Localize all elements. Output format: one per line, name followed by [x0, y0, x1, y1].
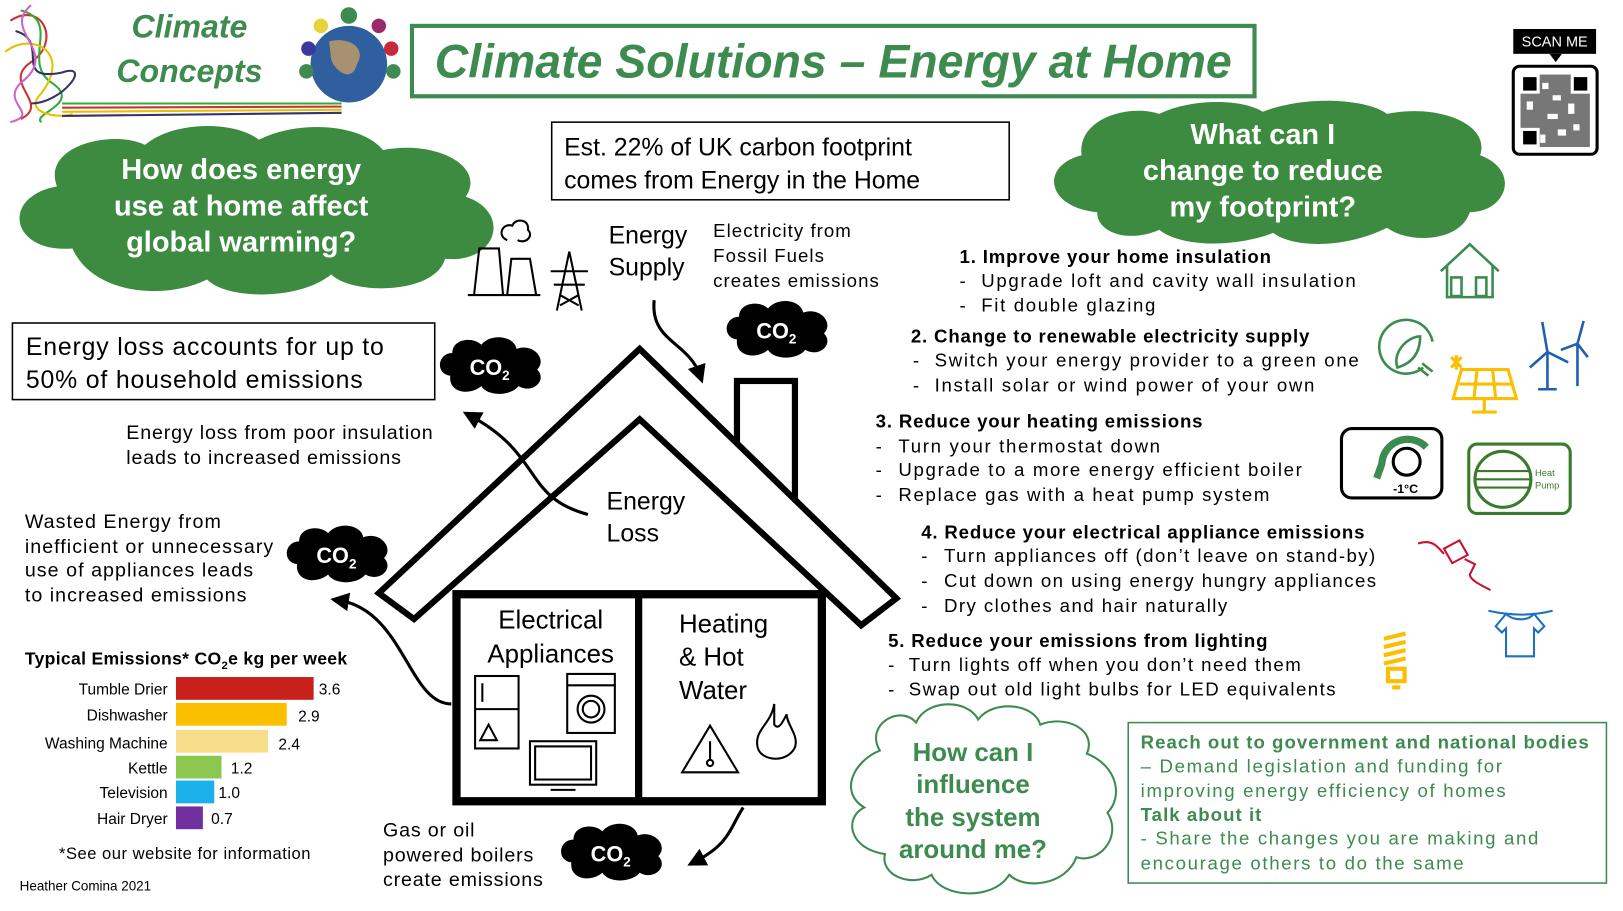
icon: heat pump: Pump — [1535, 481, 1559, 491]
cloud: what can I change: my footprint? — [1169, 191, 1356, 223]
text: wasted energy: inefficient or unnecessary — [25, 536, 274, 558]
box: reach out — [1128, 723, 1606, 883]
item 5: 5. Reduce your emissions from lighting — [888, 630, 1268, 651]
bar chart: typical emissions: 3.6 — [319, 682, 340, 699]
item 4: Turn appliances off (don’t leave on stand-by) — [944, 545, 1377, 566]
co2 cloud 3: 2 — [349, 556, 356, 571]
box: reach out: - Share the changes you are making and — [1141, 828, 1540, 849]
text: wasted energy: use of appliances leads — [25, 560, 254, 582]
co2 cloud 2: 2 — [789, 332, 796, 347]
text: boilers — [383, 819, 544, 891]
item 1 — [960, 246, 1357, 316]
cloud: how can I influence: around me? — [899, 836, 1047, 864]
cloud: how does energy affect global warming: use at home affect — [114, 190, 369, 222]
bar chart: typical emissions: 1.2 — [231, 760, 252, 777]
CO2 clouds — [440, 337, 541, 394]
co2 cloud 2 — [727, 301, 827, 358]
bar chart: typical emissions: Hair Dryer — [97, 811, 168, 828]
item 3: - — [876, 459, 884, 480]
text: poor insulation: Energy loss from poor insulation — [126, 422, 434, 444]
item 5: - — [888, 679, 896, 700]
item 3 — [876, 411, 1303, 505]
cloud: how does energy affect global warming: global warming? — [126, 227, 356, 259]
cloud: how can I influence — [851, 704, 1116, 893]
icon: thermostat — [1341, 429, 1442, 498]
item 4: Cut down on using energy hungry appliances — [944, 570, 1378, 591]
icon: TV — [530, 741, 596, 790]
cloud: what can I change: What can I — [1190, 119, 1335, 151]
item 4 — [921, 521, 1378, 616]
label: heating & hot water — [679, 611, 768, 705]
item 3: - — [876, 484, 884, 505]
bar chart: typical emissions: Kettle — [128, 760, 168, 777]
item 1: Upgrade loft and cavity wall insulation — [981, 270, 1357, 291]
solutions list — [876, 246, 1378, 700]
house — [379, 349, 896, 801]
item 5: Turn lights off when you don’t need them — [909, 654, 1302, 675]
icon: house — [1441, 244, 1499, 297]
arrow: energy loss — [471, 416, 588, 515]
item 3: 3. Reduce your heating emissions — [876, 411, 1203, 432]
co2 cloud 4 — [561, 824, 662, 880]
arrow: boiler — [696, 807, 743, 861]
energy supply text: Fossil Fuels — [713, 245, 825, 266]
icon: power plant — [468, 221, 540, 295]
item 5: - — [888, 654, 896, 675]
logo text: Climate — [131, 8, 247, 44]
icon: unplugged — [1418, 540, 1491, 590]
CO2 clouds: 2 — [502, 368, 510, 383]
label: electrical appliances: Electrical — [498, 606, 603, 634]
item 5: Swap out old light bulbs for LED equivalents — [909, 679, 1337, 700]
text: wasted energy: Wasted Energy from — [25, 511, 222, 533]
co2 cloud 2: CO — [756, 319, 789, 344]
item 3: - — [876, 435, 884, 456]
item 2 — [911, 326, 1360, 395]
label: energy loss — [607, 488, 686, 547]
label: electrical appliances — [487, 606, 614, 669]
logo: climate concepts: Concepts — [116, 53, 262, 89]
box: reach out: improving energy efficiency of homes — [1141, 780, 1507, 801]
bar chart: typical emissions: Dishwasher — [87, 708, 168, 725]
cloud: how does energy affect global warming — [20, 126, 494, 294]
bar chart: typical emissions: Typical Emissions* CO — [25, 649, 222, 669]
footnote: *See our website for information — [59, 844, 311, 863]
item 2: Switch your energy provider to a green one — [935, 349, 1360, 370]
text: boilers: powered boilers — [383, 844, 534, 866]
item 1: - — [960, 270, 967, 291]
energy loss box: Energy loss accounts for up to — [26, 334, 385, 361]
energy supply text: Electricity from — [713, 220, 852, 241]
text: boilers: Gas or oil — [383, 819, 475, 841]
QR code: SCAN ME — [1522, 35, 1588, 51]
energy supply text: Supply — [609, 254, 685, 281]
bar chart: typical emissions: 0.7 — [211, 811, 233, 828]
bar chart: typical emissions: 2.4 — [278, 737, 300, 754]
arrow: energy supply — [654, 300, 700, 375]
item 4: 4. Reduce your electrical appliance emissions — [921, 521, 1365, 542]
text: wasted energy: to increased emissions — [25, 584, 248, 606]
text: poor insulation — [126, 422, 434, 469]
item 3: Replace gas with a heat pump system — [898, 484, 1271, 505]
globe — [311, 26, 387, 102]
box: reach out: Talk about it — [1141, 804, 1262, 825]
item 2: Install solar or wind power of your own — [935, 374, 1316, 395]
bar chart: typical emissions: 2 — [222, 660, 228, 672]
energy supply text: creates emissions — [713, 270, 880, 291]
bar chart: typical emissions — [25, 649, 347, 829]
item 4: Dry clothes and hair naturally — [944, 595, 1229, 616]
text: boilers: create emissions — [383, 869, 544, 891]
item 5 — [888, 630, 1337, 700]
text: poor insulation: leads to increased emissions — [126, 447, 402, 469]
stat box: 22% — [552, 122, 1009, 200]
cloud: what can I change: change to reduce — [1143, 155, 1383, 187]
item 4: - — [921, 545, 929, 566]
icon: flame — [757, 704, 796, 759]
energy supply text — [609, 220, 880, 291]
co2 cloud 4: CO — [591, 841, 623, 866]
bar chart: typical emissions: e kg per week — [228, 649, 347, 669]
label: energy loss: Loss — [607, 520, 659, 547]
QR code — [1513, 29, 1597, 154]
box: reach out: Reach out to government and national bodies — [1141, 731, 1590, 752]
icon: solar panel — [1451, 355, 1516, 412]
cloud: how can I influence: the system — [905, 804, 1041, 832]
bar chart: typical emissions: Television — [100, 785, 168, 802]
icon: pylon — [551, 252, 588, 311]
icon: leaf plug — [1379, 320, 1433, 376]
label: electrical appliances: Appliances — [487, 641, 614, 669]
arrow: appliances — [340, 600, 451, 704]
label: heating & hot water: Heating — [679, 611, 768, 639]
item 2: - — [913, 349, 921, 370]
box: reach out: – Demand legislation and funding for — [1141, 755, 1504, 776]
label: energy loss: Energy — [607, 488, 686, 515]
stat box: 22%: comes from Energy in the Home — [564, 167, 920, 194]
text: wasted energy — [25, 511, 274, 606]
energy loss box: 50% of household emissions — [26, 367, 363, 394]
icon: wind turbines — [1530, 321, 1588, 389]
stat box: 22%: Est. 22% of UK carbon footprint — [564, 134, 912, 161]
label: heating & hot water: Water — [679, 677, 747, 705]
energy loss box — [12, 323, 435, 400]
co2 cloud 4: 2 — [623, 854, 631, 869]
cloud: what can I change — [1054, 101, 1505, 244]
item 3: Upgrade to a more energy efficient boiler — [898, 459, 1303, 480]
item 4: - — [921, 570, 929, 591]
icon: heat pump — [1469, 444, 1570, 513]
item 2: 2. Change to renewable electricity supply — [911, 326, 1310, 347]
item 2: - — [913, 374, 921, 395]
item 1: Fit double glazing — [981, 295, 1157, 316]
item 4: - — [921, 595, 929, 616]
credit: Heather Comina 2021 — [20, 878, 151, 893]
title: Climate Solutions – Energy at Home — [435, 36, 1232, 89]
label: heating & hot water: & Hot — [679, 644, 744, 672]
icon: thermostat: -1°C — [1393, 482, 1418, 496]
item 1: - — [960, 295, 967, 316]
energy supply text: Energy — [609, 222, 688, 249]
cloud: how can I influence: How can I — [913, 739, 1033, 767]
item 3: Turn your thermostat down — [898, 435, 1162, 456]
icon: fridge — [475, 676, 519, 748]
logo: climate concepts — [5, 5, 401, 122]
bar chart: typical emissions: 1.0 — [218, 785, 240, 802]
cloud: how can I influence: influence — [916, 771, 1030, 799]
bar chart: typical emissions: Tumble Drier — [79, 682, 168, 699]
icon: drying shirt — [1488, 611, 1553, 656]
bar chart: typical emissions: Washing Machine — [45, 735, 168, 752]
icon: thermometer warning — [682, 726, 738, 772]
box: reach out: encourage others to do the same — [1141, 853, 1465, 874]
cloud: how does energy affect global warming: How does energy — [121, 154, 361, 186]
bar chart: typical emissions: 2.9 — [298, 709, 320, 726]
co2 cloud 3 — [287, 526, 388, 582]
icon: heat pump: Heat — [1535, 468, 1555, 478]
icon: bulb — [1384, 634, 1406, 687]
item 1: 1. Improve your home insulation — [960, 246, 1272, 267]
CO2 clouds: CO — [470, 355, 502, 380]
co2 cloud 3: CO — [316, 543, 349, 568]
icon: washer — [567, 674, 615, 733]
